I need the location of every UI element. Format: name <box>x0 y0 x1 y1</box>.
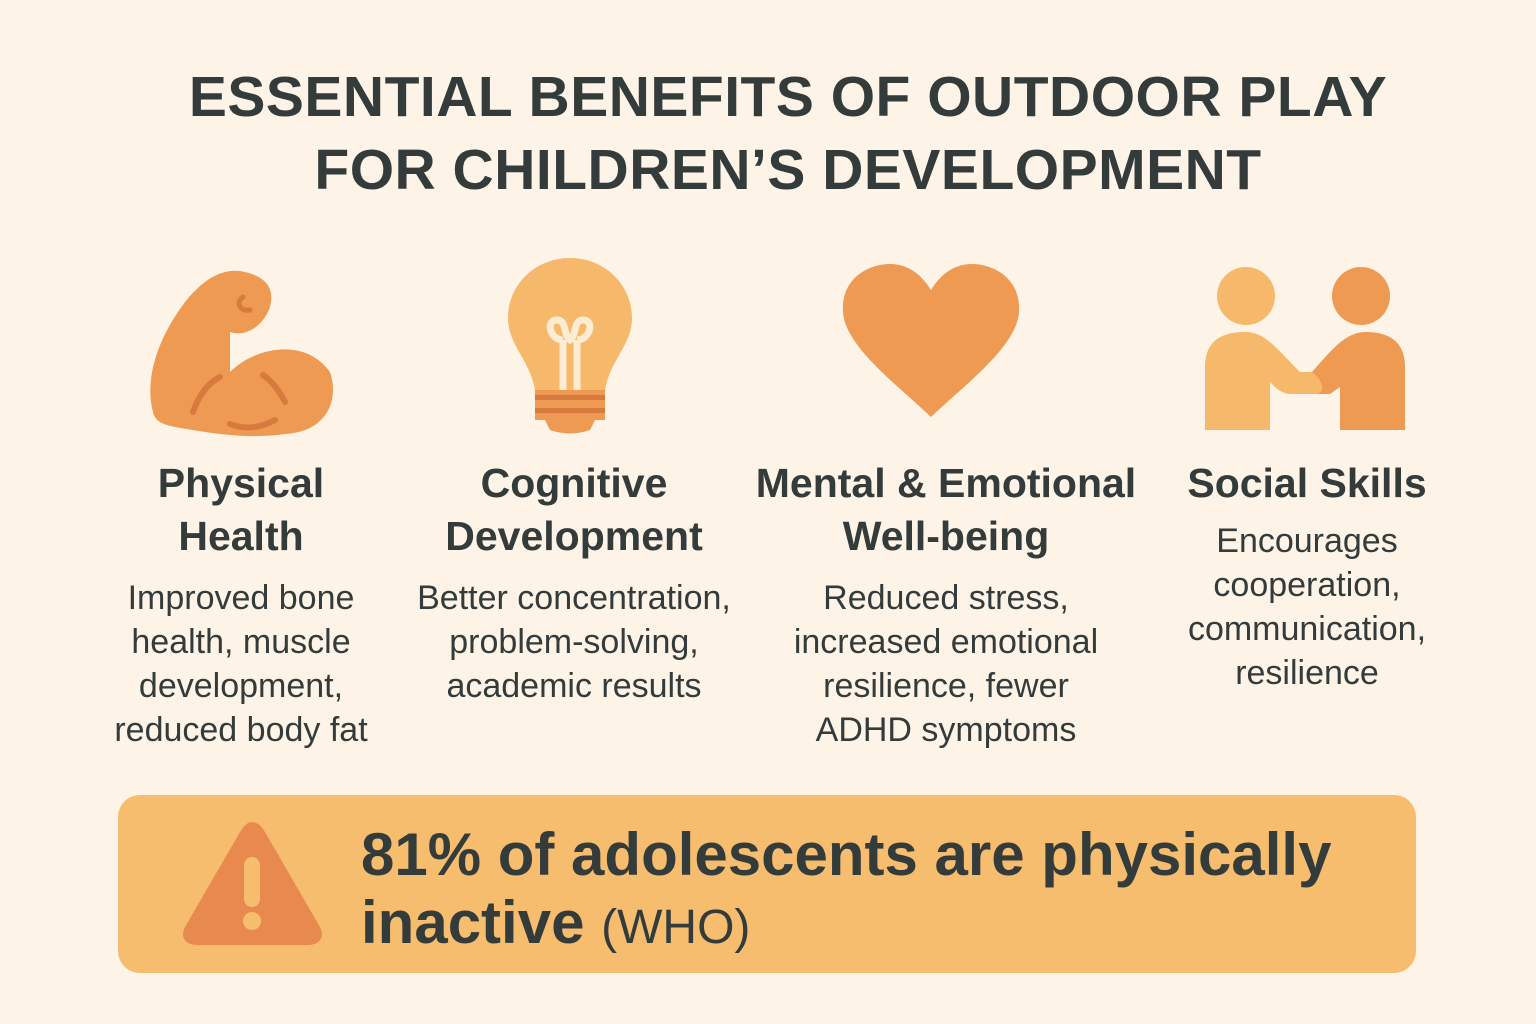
text <box>794 579 1098 749</box>
text: statistic: inactive (WHO) <box>361 889 750 956</box>
heading <box>756 460 1136 559</box>
text <box>114 579 368 749</box>
text <box>1188 522 1426 692</box>
text: cooperation, <box>1213 566 1401 604</box>
text: Improved bone <box>128 579 354 617</box>
title: FOR CHILDREN’S DEVELOPMENT <box>314 138 1262 202</box>
heading <box>158 460 324 559</box>
text <box>417 579 731 705</box>
column: mental <box>756 460 1136 749</box>
column: physical health <box>114 460 368 749</box>
text: Reduced stress, <box>823 579 1069 617</box>
heading: Social Skills <box>1187 460 1427 506</box>
text: reduced body fat <box>114 711 368 749</box>
heading: Cognitive <box>481 460 667 506</box>
heading: Physical <box>158 460 324 506</box>
text: statistic: 81% of adolescents are physically <box>361 821 1331 888</box>
icon: handshake people <box>1205 267 1405 430</box>
title: ESSENTIAL BENEFITS OF OUTDOOR PLAY <box>189 65 1387 129</box>
heading: Development <box>445 513 703 559</box>
icon: heart <box>842 264 1020 417</box>
heading: Health <box>178 513 304 559</box>
callout banner <box>118 795 1416 973</box>
icon: flexed arm <box>150 270 333 436</box>
text: health, muscle <box>131 623 351 661</box>
title <box>189 65 1387 202</box>
column: cognitive <box>417 460 731 705</box>
text: resilience, fewer <box>823 667 1069 705</box>
text: Better concentration, <box>417 579 731 617</box>
text: problem-solving, <box>449 623 699 661</box>
text: ADHD symptoms <box>816 711 1076 749</box>
text: resilience <box>1235 654 1379 692</box>
text: development, <box>139 667 343 705</box>
heading: Well-being <box>843 513 1049 559</box>
heading: Mental & Emotional <box>756 460 1136 506</box>
text: communication, <box>1188 610 1426 648</box>
text: increased emotional <box>794 623 1098 661</box>
icon: light bulb <box>508 258 632 434</box>
heading <box>445 460 703 559</box>
text: academic results <box>446 667 702 705</box>
icon: warning <box>183 822 322 945</box>
text: statistic <box>361 821 1332 956</box>
text: Encourages <box>1216 522 1398 560</box>
column: social <box>1187 460 1427 692</box>
